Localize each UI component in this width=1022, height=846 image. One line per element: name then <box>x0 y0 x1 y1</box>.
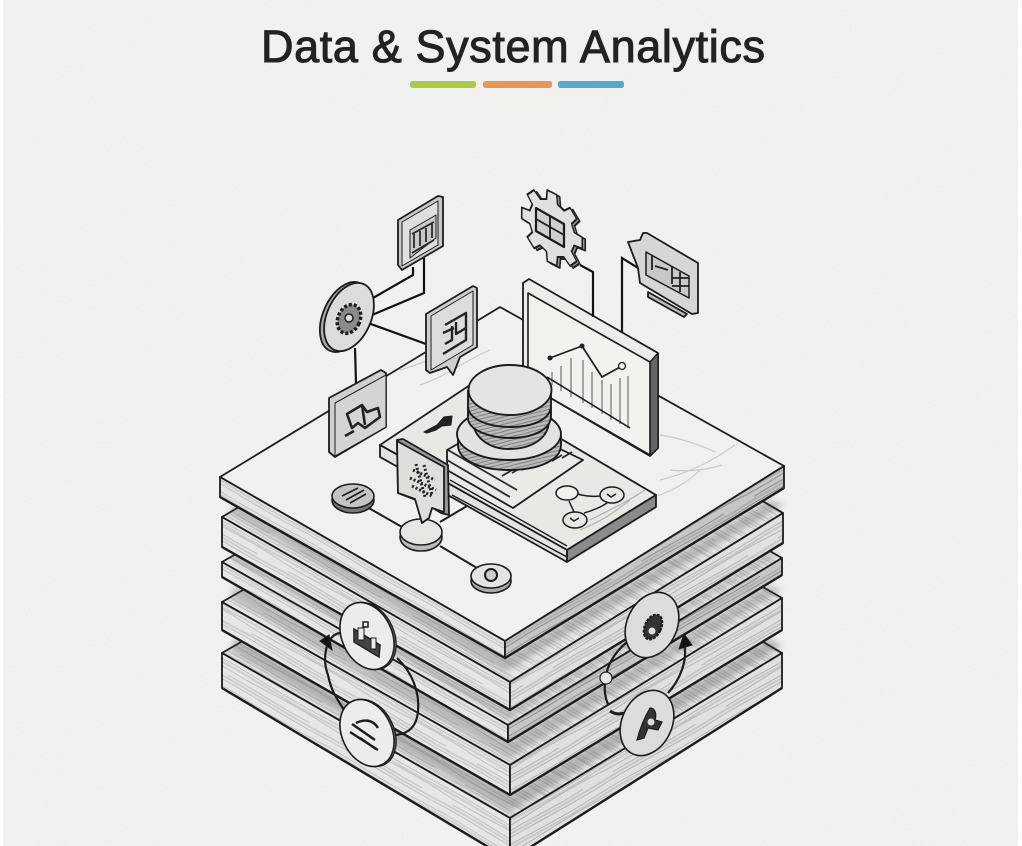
node: right disc <box>471 564 511 593</box>
small network on top face <box>332 484 511 593</box>
badge: bug <box>615 584 689 666</box>
node: centre disc <box>400 519 442 551</box>
monitor with line chart <box>523 279 658 456</box>
icon panel: dotted speech bubble <box>397 439 449 523</box>
icon: gear disc <box>310 274 384 360</box>
lifecycle loop: right <box>600 584 692 764</box>
platform arrow icon <box>424 416 452 433</box>
platform document <box>447 420 583 508</box>
chart bars <box>552 358 628 428</box>
chart line <box>548 344 626 377</box>
base platform <box>380 385 656 562</box>
layered slab stack <box>220 307 784 846</box>
badge: toolbox <box>330 594 406 678</box>
database stack <box>457 365 561 470</box>
icon panel: lower left map <box>329 370 386 457</box>
slab 4 <box>222 440 782 795</box>
slab 1 top <box>220 307 784 658</box>
slab 5 <box>222 490 782 846</box>
platform network graph <box>556 486 624 528</box>
icon: gear panel <box>522 177 585 281</box>
badge: rocket <box>610 682 684 764</box>
connector lines <box>355 258 638 383</box>
slab 3 <box>222 400 782 742</box>
badge: stripes <box>330 691 406 775</box>
icon panel: top left report <box>398 196 443 270</box>
lifecycle loop: left <box>320 594 418 775</box>
node: left disc <box>332 484 374 513</box>
title accent bars <box>410 81 624 88</box>
icon panel: upper right speech bubble <box>628 233 698 317</box>
icon panel: speech bubble map <box>426 286 477 375</box>
slab 2 <box>222 350 784 710</box>
title: Data & System Analytics <box>261 21 765 72</box>
